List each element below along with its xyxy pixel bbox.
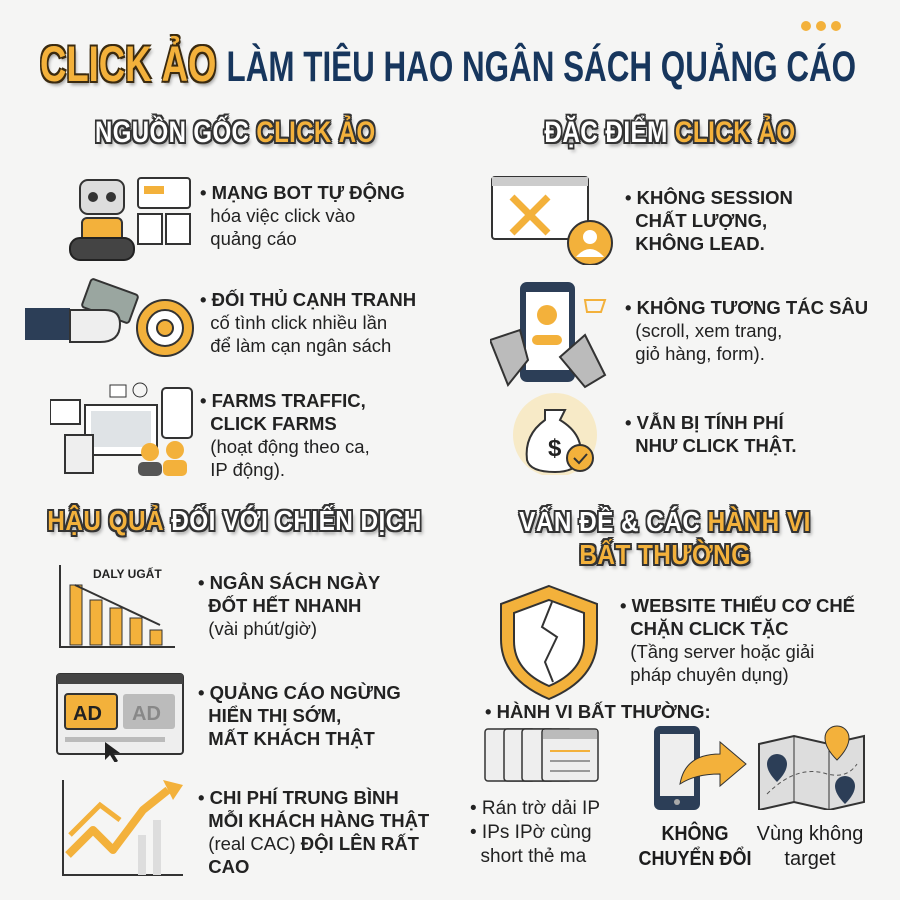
text: no target region: target	[784, 848, 836, 870]
text: no deep interaction	[625, 297, 868, 364]
text: no deep interaction: • KHÔNG TƯƠNG TÁC SÂU	[625, 297, 868, 318]
text: website lacks: pháp chuyên dụng)	[630, 664, 789, 685]
text: competitors	[200, 289, 416, 356]
text: no session: • KHÔNG SESSION	[625, 187, 793, 208]
text: competitors: cố tình click nhiều lần	[210, 312, 387, 333]
heading: van de: BẤT THƯỜNG	[579, 539, 751, 570]
icon: money bag	[513, 393, 597, 475]
text: no deep interaction: (scroll, xem trang,	[635, 320, 782, 341]
text: IP list: • Rán trờ dải IP	[470, 798, 600, 819]
text: website lacks: • WEBSITE THIẾU CƠ CHẾ	[620, 595, 855, 616]
text: CAC: (real CAC) ĐỘI LÊN RẤT	[208, 833, 419, 854]
text: no conversion: KHÔNG	[661, 823, 728, 845]
text: bot: hóa việc click vào	[210, 205, 355, 226]
text: farms	[200, 390, 370, 480]
text: no deep interaction: giỏ hàng, form).	[635, 343, 765, 364]
text: competitors: để làm cạn ngân sách	[210, 335, 391, 356]
text: website lacks: (Tầng server hoặc giải	[630, 641, 814, 662]
text: no conversion: CHUYỂN ĐỔI	[638, 848, 752, 870]
heading: hau qua: HẬU QUẢ ĐỐI VỚI CHIẾN DỊCH	[47, 505, 422, 536]
icon: computers farm	[50, 382, 193, 476]
icon: phone hands	[490, 282, 606, 388]
text: still charged: NHƯ CLICK THẬT.	[635, 435, 797, 456]
icon: map pins	[758, 726, 865, 810]
icon: ad window: AD	[132, 703, 161, 725]
text: farms: • FARMS TRAFFIC,	[200, 390, 366, 411]
text: CAC: MỖI KHÁCH HÀNG THẬT	[208, 810, 429, 831]
text: farms: CLICK FARMS	[210, 413, 337, 434]
text: still charged	[625, 412, 797, 456]
text: no target region	[756, 823, 863, 870]
icon: chart x user	[491, 176, 613, 265]
text: website lacks	[620, 595, 855, 685]
text: abnormal behavior heading: • HÀNH VI BẤT THƯỜNG:	[485, 701, 711, 722]
text: bot: quảng cáo	[210, 228, 297, 249]
heading: van de	[518, 504, 814, 570]
text: ads stop: • QUẢNG CÁO NGỪNG	[198, 682, 401, 703]
text: no conversion	[638, 822, 752, 870]
text: IP list	[470, 798, 600, 867]
text: competitors: • ĐỐI THỦ CẠNH TRANH	[200, 289, 416, 310]
text: CAC	[198, 787, 429, 877]
text: bot	[200, 182, 405, 249]
text: farms: IP động).	[210, 459, 285, 480]
icon: money bag: $	[548, 435, 562, 462]
text: no session: KHÔNG LEAD.	[635, 233, 765, 254]
icon: rising chart	[62, 780, 183, 876]
text: CAC: • CHI PHÍ TRUNG BÌNH	[198, 787, 399, 808]
text: still charged: • VẪN BỊ TÍNH PHÍ	[625, 412, 784, 433]
heading: van de: VẤN ĐỀ & CÁC HÀNH VI	[519, 506, 811, 537]
text: no target region: Vùng không	[757, 823, 863, 845]
text: no session: CHẤT LƯỢNG,	[635, 210, 767, 231]
text: ads stop: MẤT KHÁCH THẬT	[208, 728, 375, 749]
text: bot: • MẠNG BOT TỰ ĐỘNG	[200, 182, 405, 203]
icon: hand money target	[25, 278, 194, 357]
heading: nguon goc: NGUỒN GỐC CLICK ẢO	[95, 116, 376, 149]
text: budget burns	[198, 572, 380, 639]
text: farms: (hoạt động theo ca,	[210, 436, 370, 457]
text: website lacks: CHẶN CLICK TẶC	[630, 618, 789, 639]
heading: dac diem: ĐẶC ĐIỂM CLICK ẢO	[544, 116, 796, 149]
text: ads stop: HIỂN THỊ SỚM,	[208, 705, 341, 726]
icon: browser windows	[484, 728, 599, 782]
text: IP list: short thẻ ma	[481, 846, 586, 867]
icon: phone arrow	[654, 726, 747, 810]
text: budget burns: ĐỐT HẾT NHANH	[208, 595, 361, 616]
text: budget burns: • NGÂN SÁCH NGÀY	[198, 572, 380, 593]
icon: robot	[69, 177, 191, 261]
text: budget burns: (vài phút/giờ)	[208, 618, 317, 639]
icon: ad window: AD	[73, 703, 102, 725]
text: ads stop	[198, 682, 401, 749]
text: CAC: CAO	[208, 856, 249, 877]
text: no session	[625, 187, 793, 254]
title: CLICK ẢO LÀM TIÊU HAO NGÂN SÁCH QUẢNG CÁO	[40, 36, 856, 92]
icon: ad window	[56, 673, 184, 762]
text: IP list: • IPs IPờ cùng	[470, 822, 592, 843]
decoration: dots	[801, 21, 841, 31]
icon: declining bar chart	[59, 565, 175, 648]
icon: declining bar chart: DALY UGẤT	[93, 566, 162, 581]
icon: broken shield	[500, 584, 598, 700]
